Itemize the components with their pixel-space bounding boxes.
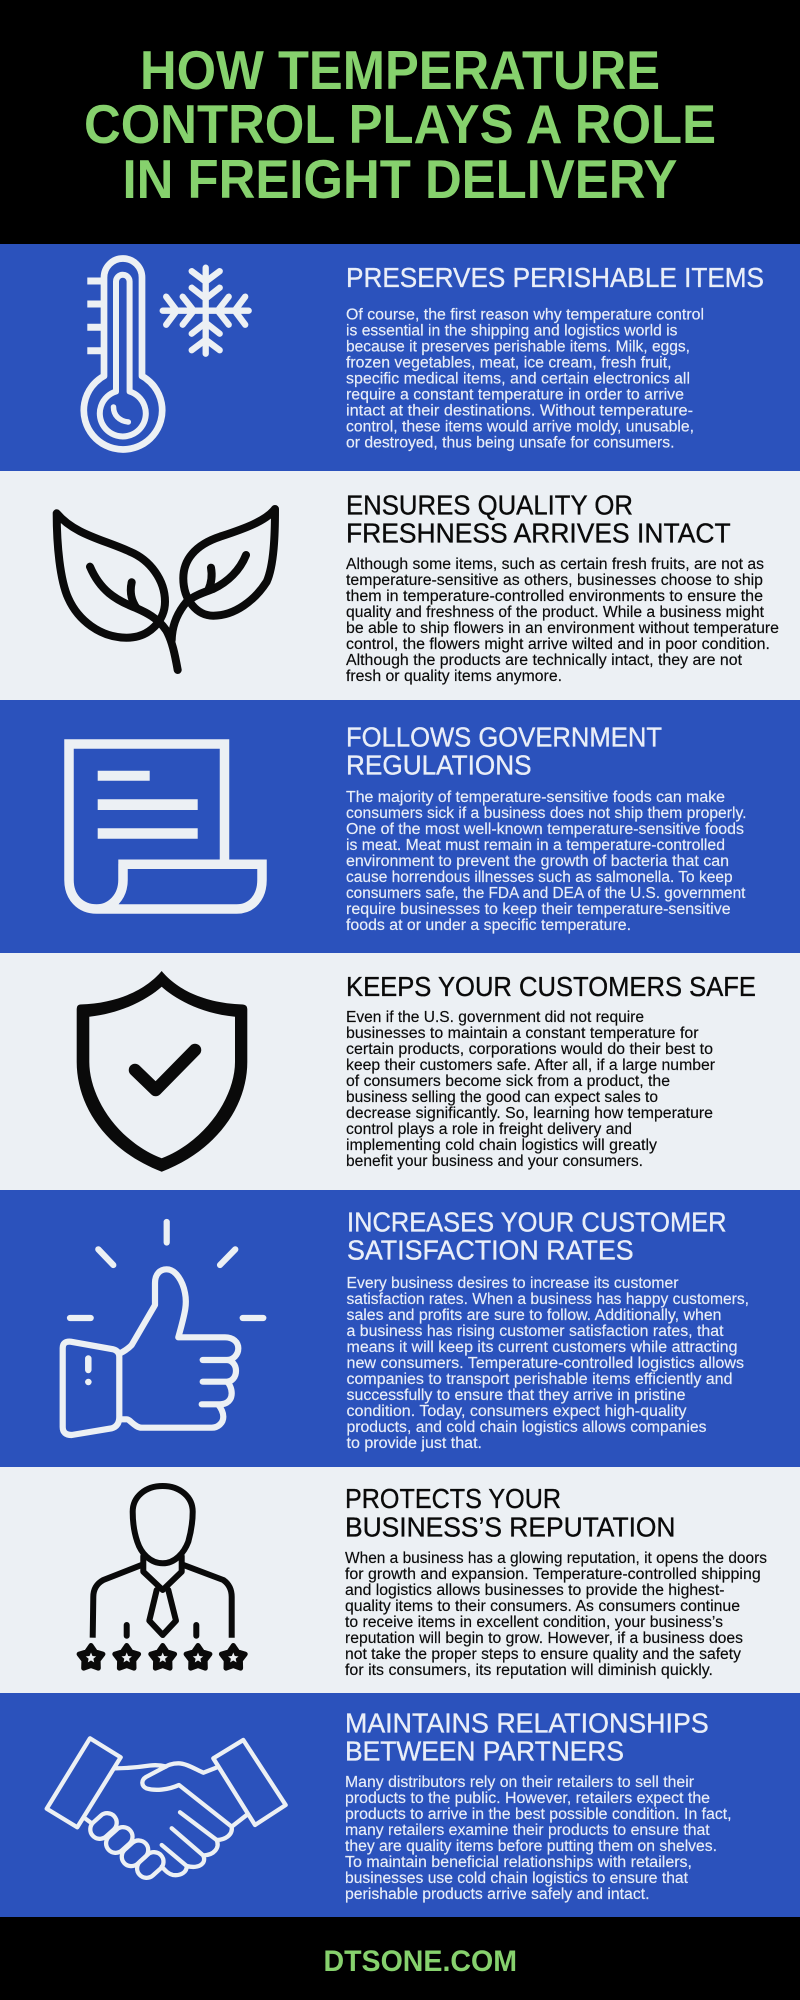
text block: quality and freshness of the product. While a business might bbox=[346, 604, 765, 621]
text block: for growth and expansion. Temperature-controlled shipping bbox=[345, 1566, 761, 1583]
text block: because it preserves perishable items. Milk, eggs, bbox=[346, 338, 690, 355]
text block: businesses to maintain a constant temperature for bbox=[346, 1025, 698, 1042]
text block: specific medical items, and certain electronics all bbox=[346, 370, 690, 387]
footer panel bbox=[0, 1917, 800, 2000]
footer website: DTSONE.COM bbox=[324, 1945, 517, 1978]
panel: follows government regulations bbox=[0, 700, 800, 953]
text block: be able to ship flowers in an environment without temperature bbox=[346, 620, 779, 637]
text block: businesses use cold chain logistics to ensure that bbox=[345, 1870, 689, 1887]
text block: business selling the good can expect sales to bbox=[346, 1089, 658, 1106]
text block: satisfaction rates. When a business has happy customers, bbox=[346, 1291, 749, 1308]
text block: keep their customers safe. After all, if a large number bbox=[346, 1057, 715, 1074]
text block: consumers sick if a business does not ship them properly. bbox=[346, 805, 746, 822]
text block: to provide just that. bbox=[346, 1435, 482, 1452]
text block: require businesses to keep their temperature-sensitive bbox=[346, 901, 731, 918]
text block: or destroyed, thus being unsafe for consumers. bbox=[346, 434, 674, 451]
text block: many retailers examine their products to ensure that bbox=[345, 1822, 710, 1839]
header panel bbox=[0, 0, 800, 244]
text block: decrease significantly. So, learning how temperature bbox=[346, 1105, 713, 1122]
heading: REGULATIONS bbox=[346, 749, 532, 780]
text block: successfully to ensure that they arrive in pristine bbox=[346, 1387, 686, 1404]
text block: fresh or quality items anymore. bbox=[346, 668, 562, 685]
text block bbox=[346, 306, 704, 451]
heading: PROTECTS YOUR bbox=[345, 1483, 561, 1514]
text block: perishable products arrive safely and intact. bbox=[345, 1886, 650, 1903]
icon: thumbs up bbox=[63, 1222, 263, 1435]
text block: The majority of temperature-sensitive foods can make bbox=[346, 789, 725, 806]
title: CONTROL PLAYS A ROLE bbox=[84, 93, 716, 155]
text block: to receive items in excellent condition, your business’s bbox=[345, 1614, 723, 1631]
text block: them in temperature-controlled environments to ensure the bbox=[346, 588, 763, 605]
text block: for its consumers, its reputation will diminish quickly. bbox=[345, 1662, 713, 1679]
heading bbox=[345, 1708, 709, 1767]
text block: consumers safe, the FDA and DEA of the U.S. government bbox=[346, 885, 746, 902]
text block: Even if the U.S. government did not require bbox=[346, 1009, 644, 1026]
text block: control, these items would arrive moldy, unusable, bbox=[346, 418, 694, 435]
text block: means it will keep its current customers while attracting bbox=[346, 1339, 738, 1356]
icon: handshake bbox=[47, 1738, 286, 1882]
text block bbox=[345, 1550, 767, 1679]
icon: person with five stars bbox=[79, 1486, 245, 1668]
text block: they are quality items before putting them on shelves. bbox=[345, 1838, 717, 1855]
text block: require a constant temperature in order to arrive bbox=[346, 386, 684, 403]
text block: condition. Today, consumers expect high-quality bbox=[346, 1403, 687, 1420]
text block: sales and profits are sure to follow. Additionally, when bbox=[346, 1307, 722, 1324]
text block: Of course, the first reason why temperature control bbox=[346, 306, 704, 323]
panel: maintains relationships bbox=[0, 1693, 800, 1917]
text block: control, the flowers might arrive wilted and in poor condition. bbox=[346, 636, 770, 653]
panel: keeps your customers safe bbox=[0, 953, 800, 1190]
heading: ENSURES QUALITY OR bbox=[346, 490, 633, 521]
text block: companies to transport perishable items efficiently and bbox=[346, 1371, 732, 1388]
text block: When a business has a glowing reputation, it opens the doors bbox=[345, 1550, 767, 1567]
text block: of consumers become sick from a product, the bbox=[346, 1073, 670, 1090]
text block: temperature-sensitive as others, businesses choose to ship bbox=[346, 572, 763, 589]
text block: reputation will begin to grow. However, if a business does bbox=[345, 1630, 743, 1647]
icon: leaves bbox=[57, 509, 275, 670]
heading: INCREASES YOUR CUSTOMER bbox=[347, 1206, 726, 1237]
text block: control plays a role in freight delivery and bbox=[346, 1121, 632, 1138]
panel: increases customer satisfaction bbox=[0, 1190, 800, 1467]
text block bbox=[345, 1774, 732, 1903]
panel: preserves perishable items bbox=[0, 244, 800, 471]
heading bbox=[346, 490, 731, 549]
text block: frozen vegetables, meat, ice cream, fresh fruit, bbox=[346, 354, 672, 371]
text block: new consumers. Temperature-controlled logistics allows bbox=[346, 1355, 744, 1372]
text block: implementing cold chain logistics will greatly bbox=[346, 1137, 657, 1154]
title: IN FREIGHT DELIVERY bbox=[122, 148, 678, 210]
icon: thermometer bbox=[84, 258, 162, 449]
text block: products to arrive in the best possible condition. In fact, bbox=[345, 1806, 732, 1823]
text block: benefit your business and your consumers. bbox=[346, 1153, 643, 1170]
text block: cause horrendous illnesses such as salmonella. To keep bbox=[346, 869, 733, 886]
panel: ensures quality or freshness bbox=[0, 471, 800, 700]
icon: shield with check bbox=[77, 971, 247, 1172]
text block bbox=[346, 789, 746, 934]
text block: One of the most well-known temperature-sensitive foods bbox=[346, 821, 744, 838]
heading: BETWEEN PARTNERS bbox=[345, 1736, 624, 1767]
title bbox=[84, 39, 716, 210]
text block: is essential in the shipping and logistics world is bbox=[346, 322, 678, 339]
heading: KEEPS YOUR CUSTOMERS SAFE bbox=[346, 971, 756, 1002]
text block: not take the proper steps to ensure quality and the safety bbox=[345, 1646, 741, 1663]
icon: snowflake bbox=[163, 268, 249, 354]
heading: MAINTAINS RELATIONSHIPS bbox=[345, 1708, 709, 1739]
text block: is meat. Meat must remain in a temperature-controlled bbox=[346, 837, 725, 854]
text block bbox=[346, 556, 779, 685]
panel: protects your business's reputation bbox=[0, 1467, 800, 1693]
text block: products, and cold chain logistics allows companies bbox=[346, 1419, 707, 1436]
text block bbox=[346, 1275, 749, 1452]
heading: FRESHNESS ARRIVES INTACT bbox=[346, 518, 731, 549]
text block: a business has rising customer satisfaction rates, that bbox=[346, 1323, 724, 1340]
heading bbox=[345, 1483, 676, 1542]
heading bbox=[347, 1206, 726, 1265]
text block: foods at or under a specific temperature. bbox=[346, 917, 631, 934]
heading: PRESERVES PERISHABLE ITEMS bbox=[346, 262, 764, 293]
heading: BUSINESS’S REPUTATION bbox=[345, 1511, 676, 1542]
heading: SATISFACTION RATES bbox=[347, 1234, 634, 1265]
text block: products to the public. However, retailers expect the bbox=[345, 1790, 710, 1807]
text block: quality items to their consumers. As consumers continue bbox=[345, 1598, 740, 1615]
text block: Although some items, such as certain fresh fruits, are not as bbox=[346, 556, 764, 573]
text block: and logistics allows businesses to provide the highest- bbox=[345, 1582, 724, 1599]
text block: Although the products are technically intact, they are not bbox=[346, 652, 743, 669]
text block bbox=[346, 1009, 715, 1170]
text block: certain products, corporations would do their best to bbox=[346, 1041, 713, 1058]
text block: Every business desires to increase its customer bbox=[346, 1275, 678, 1292]
text block: Many distributors rely on their retailers to sell their bbox=[345, 1774, 694, 1791]
text block: environment to prevent the growth of bacteria that can bbox=[346, 853, 729, 870]
text block: To maintain beneficial relationships with retailers, bbox=[345, 1854, 692, 1871]
icon: document scroll bbox=[69, 744, 262, 909]
text block: intact at their destinations. Without temperature- bbox=[346, 402, 693, 419]
heading: FOLLOWS GOVERNMENT bbox=[346, 722, 662, 753]
heading bbox=[346, 722, 662, 780]
title: HOW TEMPERATURE bbox=[140, 39, 660, 101]
